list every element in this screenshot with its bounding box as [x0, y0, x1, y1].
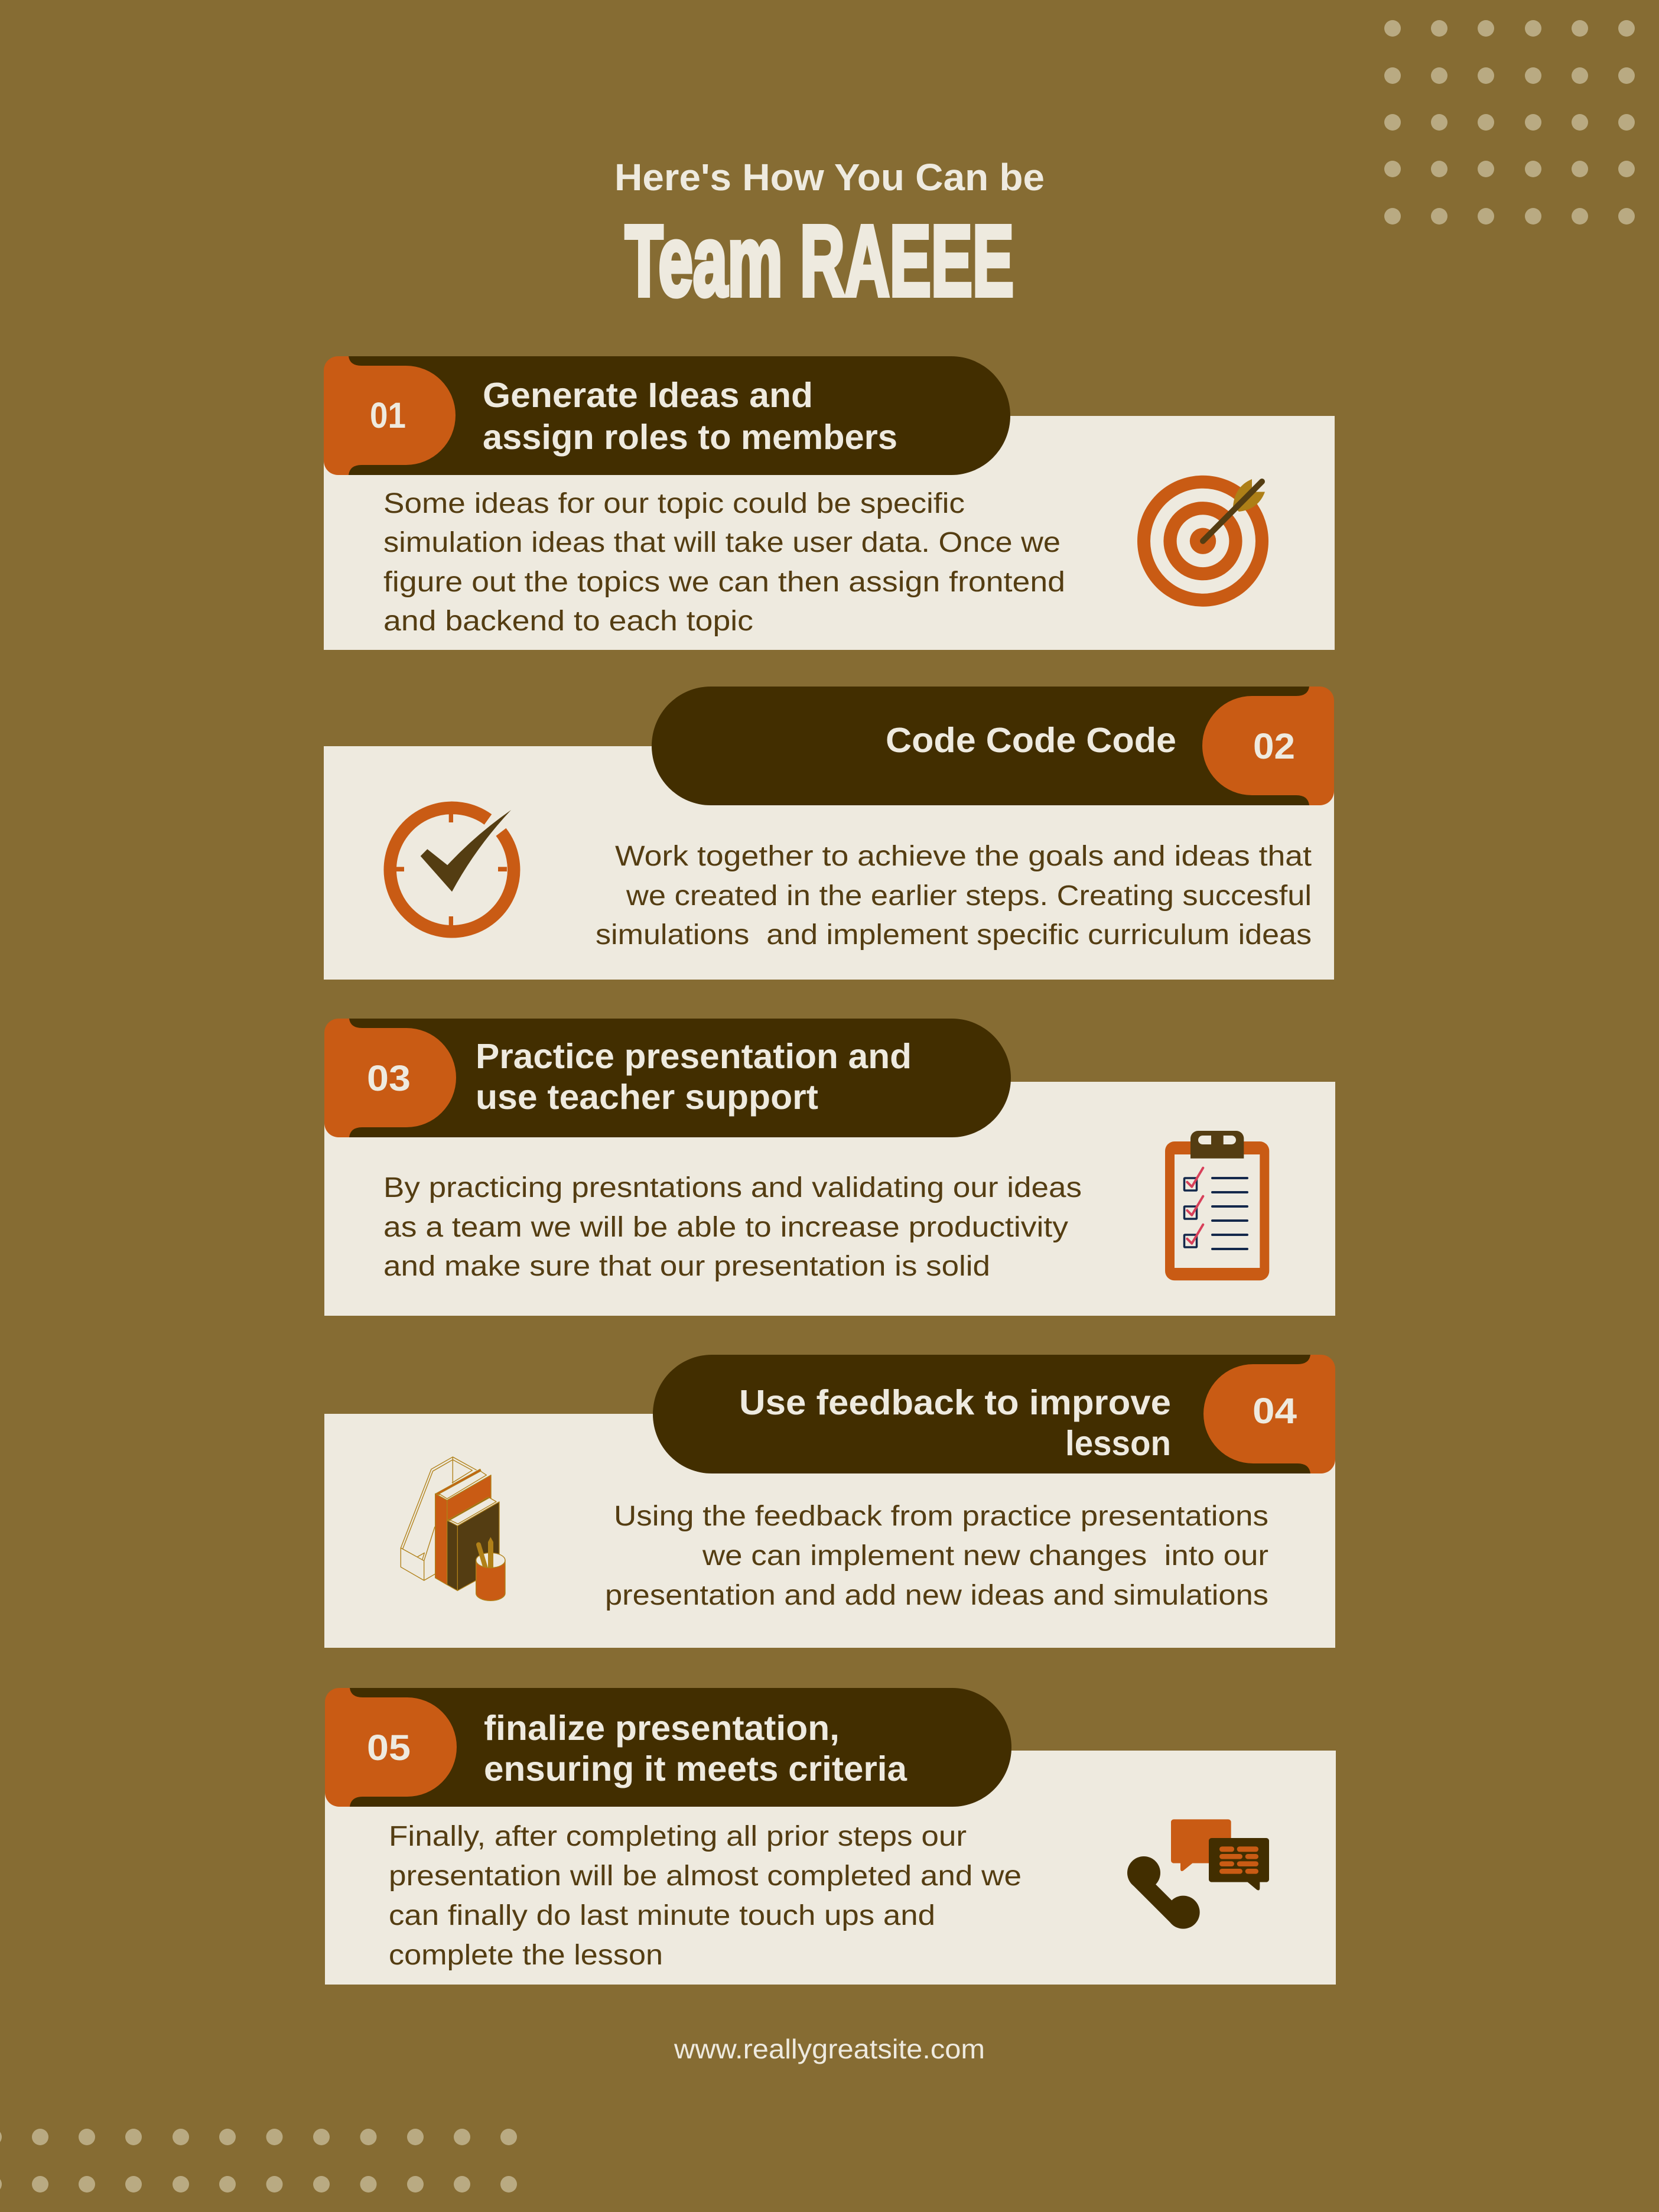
step number: 04 — [1253, 1391, 1297, 1431]
heading: Practice presentation and — [476, 1037, 912, 1076]
header banner — [653, 1355, 1335, 1473]
panel background — [324, 746, 1334, 980]
body text — [383, 488, 1065, 637]
heading: finalize presentation, — [484, 1709, 840, 1748]
body text — [389, 1821, 1022, 1971]
body text: we can implement new changes into our — [702, 1540, 1268, 1572]
body text: simulation ideas that will take user data. Once we — [383, 527, 1061, 558]
subtitle: Here's How You Can be — [614, 156, 1045, 199]
decorative dot grid: bottom left — [0, 2129, 517, 2193]
panel: step 02 — [324, 687, 1334, 980]
header banner — [324, 1019, 1011, 1137]
body text — [383, 1172, 1082, 1282]
title: Team RAEEE — [625, 205, 1014, 317]
panel: step 03 — [324, 1019, 1335, 1316]
body text — [605, 1501, 1268, 1611]
icon: target with arrow — [1137, 476, 1268, 607]
heading: use teacher support — [476, 1078, 818, 1117]
panel: step 01 — [324, 356, 1335, 650]
step number: 05 — [367, 1728, 411, 1768]
heading: Code Code Code — [886, 721, 1176, 760]
step number: 02 — [1253, 726, 1295, 766]
panel background — [324, 1082, 1335, 1316]
body text: presentation will be almost completed and we — [389, 1860, 1022, 1892]
body text: By practicing presntations and validating our ideas — [383, 1172, 1082, 1203]
panel: step 04 — [324, 1355, 1335, 1648]
decorative dot grid: top right — [1384, 20, 1635, 225]
heading — [483, 376, 897, 457]
heading: lesson — [1065, 1424, 1171, 1463]
body text: simulations and implement specific curriculum ideas — [596, 919, 1312, 951]
body text: as a team we will be able to increase productivity — [383, 1212, 1068, 1243]
body text: complete the lesson — [389, 1940, 663, 1971]
body text: Work together to achieve the goals and ideas that — [615, 841, 1312, 872]
heading — [476, 1037, 912, 1117]
step number: 03 — [367, 1058, 411, 1098]
header banner — [325, 1688, 1011, 1807]
body text: Finally, after completing all prior steps our — [389, 1821, 967, 1852]
heading — [484, 1709, 907, 1788]
header banner — [324, 356, 1010, 475]
heading: assign roles to members — [483, 418, 897, 457]
heading: Generate Ideas and — [483, 376, 813, 415]
icon: phone and chat bubbles — [1127, 1819, 1269, 1929]
panel background — [324, 416, 1335, 650]
body text — [596, 841, 1312, 951]
body text: can finally do last minute touch ups and — [389, 1900, 935, 1931]
body text: presentation and add new ideas and simulations — [605, 1580, 1268, 1611]
heading — [739, 1383, 1171, 1463]
panel: step 05 — [325, 1688, 1336, 1985]
body text: Some ideas for our topic could be specific — [383, 488, 965, 519]
body text: and backend to each topic — [383, 606, 753, 637]
header banner — [652, 687, 1334, 805]
footer website: www.reallygreatsite.com — [674, 2034, 985, 2064]
step number: 01 — [370, 395, 406, 435]
icon: books and pencil cup — [401, 1457, 505, 1601]
body text: and make sure that our presentation is solid — [383, 1251, 990, 1282]
body text: Using the feedback from practice presentations — [614, 1501, 1268, 1532]
icon: clipboard checklist — [1165, 1131, 1269, 1280]
heading: Use feedback to improve — [739, 1383, 1171, 1422]
body text: we created in the earlier steps. Creating succesful — [626, 880, 1312, 912]
heading: ensuring it meets criteria — [484, 1749, 907, 1788]
body text: figure out the topics we can then assign frontend — [383, 567, 1065, 598]
icon: clock with check mark — [390, 808, 514, 932]
panel background — [325, 1751, 1336, 1985]
panel background — [324, 1414, 1335, 1648]
